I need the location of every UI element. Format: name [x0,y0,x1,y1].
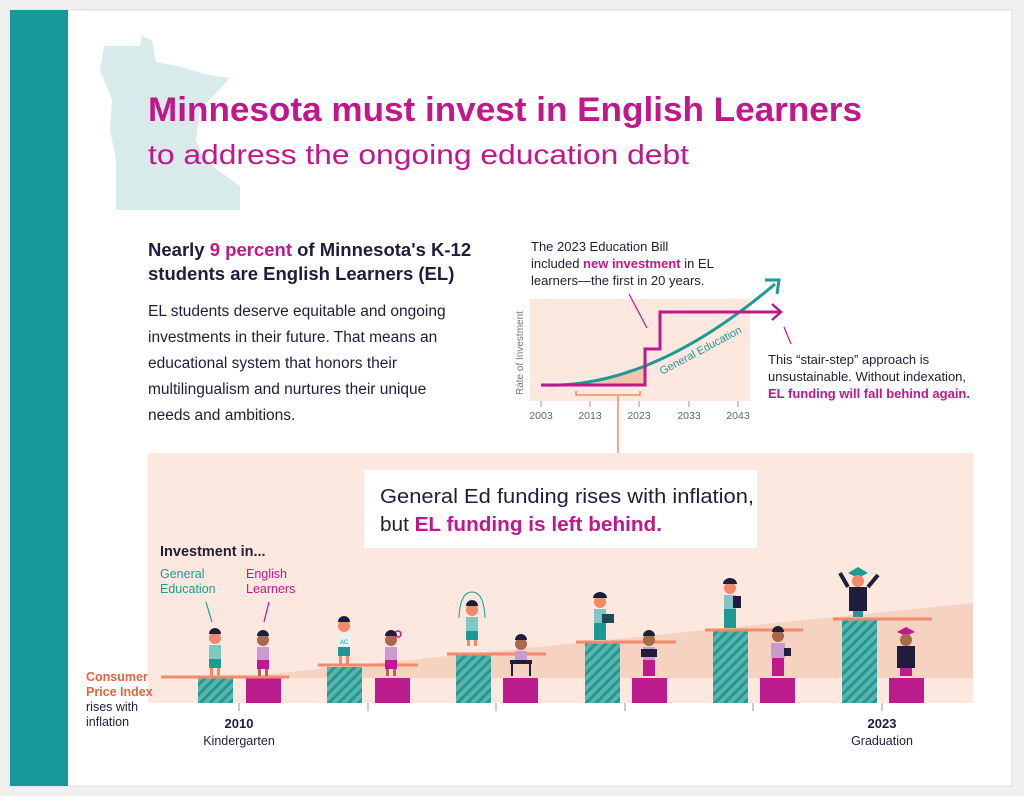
bars [198,620,924,703]
legend: English [246,567,287,581]
callout: 2023 education bill [531,239,714,328]
callout: 2023 education bill: The 2023 Education Bill [531,239,668,254]
panel: funding over time [86,453,973,729]
subtitle: to address the ongoing education debt [148,139,689,170]
heading: 9 percent [148,239,471,284]
CPI label [86,670,153,729]
label: 2023 [851,716,913,748]
text block: intro: EL students deserve equitable and ongoing [148,303,446,320]
heading: 9 percent: Nearly 9 percent of Minnesota's K-12 [148,239,471,260]
callout: stair-step: EL funding will fall behind again. [768,386,970,401]
kids: general education: AC [340,640,349,646]
kids: english learners [257,626,915,676]
chart: rate of investment [515,280,781,454]
CPI label: Consumer [86,670,148,684]
heading: 9 percent: students are English Learners (EL) [148,263,454,284]
callout: stair-step: This “stair-step” approach is [768,352,930,367]
text block: intro [148,303,446,424]
callout box [364,470,757,548]
chart: rate of investment: 2033 [677,410,701,422]
chart: rate of investment: 2043 [726,410,750,422]
text block: intro: needs and ambitions. [148,407,295,424]
legend: General [160,567,204,581]
legend: Learners [246,582,295,596]
label: 2023: 2023 [868,716,896,731]
chart: rate of investment: General Education [658,324,744,378]
callout: stair-step: unsustainable. Without indexation, [768,369,966,384]
chart: rate of investment: 2013 [578,410,602,422]
kids: general education [209,567,878,676]
legend [160,544,295,622]
callout: 2023 education bill: learners—the first in 20 years. [531,273,704,288]
chart: rate of investment: Rate of Investment [515,311,526,395]
title: Minnesota must invest in English Learners [148,91,862,129]
legend: Education [160,582,216,596]
CPI label: inflation [86,715,129,729]
chart: rate of investment: 2023 [627,410,651,422]
CPI label: rises with [86,700,138,714]
teal stripe [10,10,68,786]
timeline ticks [239,703,882,711]
chart: rate of investment: 2003 [529,410,553,422]
label: 2010 [203,716,275,748]
callout: 2023 education bill: included new investment in EL [531,256,714,271]
icon: Minnesota shape [100,36,240,210]
callout box: General Ed funding rises with inflation, [380,486,754,508]
label: 2010: 2010 [225,716,253,731]
text block: intro: educational system that honors their [148,355,397,372]
legend: Investment in... [160,544,266,560]
text block: intro: multilingualism and nurtures their unique [148,381,426,398]
callout: stair-step [768,327,970,401]
label: 2023: Graduation [851,734,913,748]
text block: intro: investments in their future. That means an [148,329,437,346]
callout box: but EL funding is left behind. [380,514,662,536]
CPI label: Price Index [86,685,153,699]
label: 2010: Kindergarten [203,734,275,748]
CPI lines [161,619,932,677]
